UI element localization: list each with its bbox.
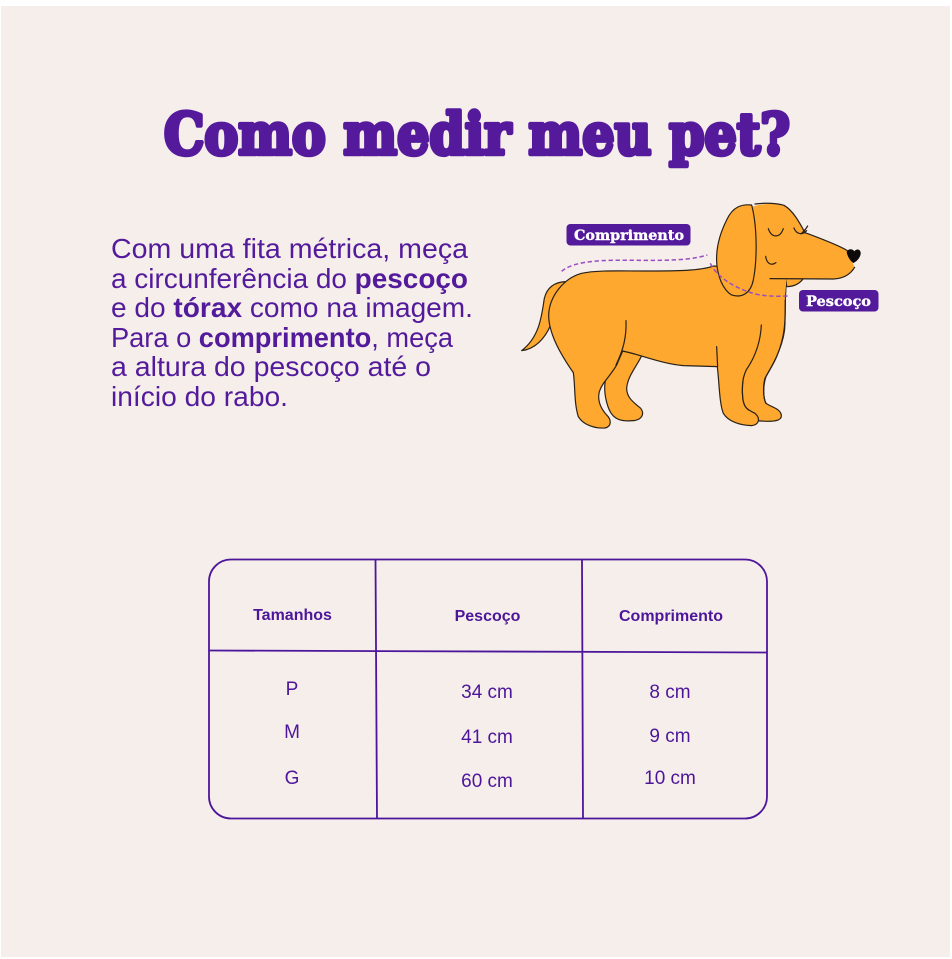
dog chin bbox=[786, 277, 803, 287]
instructions text block: a altura do pescoço até o bbox=[111, 351, 431, 382]
far rear leg bbox=[605, 351, 643, 421]
column: comprimento bbox=[619, 608, 723, 789]
dog illustration bbox=[522, 203, 861, 428]
size table bbox=[209, 560, 767, 818]
dog eyes bbox=[768, 226, 808, 236]
dog ear bbox=[717, 205, 756, 296]
column: tamanhos: Tamanhos bbox=[253, 607, 332, 624]
column: pescoço: 41 cm bbox=[461, 727, 513, 748]
column: tamanhos: M bbox=[284, 722, 300, 743]
title: Como medir meu pet? bbox=[164, 101, 790, 168]
head outline bbox=[755, 203, 855, 279]
instructions text block: e do tórax como na imagem. bbox=[111, 292, 473, 323]
dog body bbox=[549, 266, 787, 428]
length measuring line bbox=[562, 255, 707, 271]
instructions text block: Com uma fita métrica, meça bbox=[111, 233, 469, 264]
column: pescoço: 60 cm bbox=[461, 771, 513, 792]
instructions text block: a circunferência do pescoço bbox=[111, 263, 468, 294]
label: comprimento bbox=[566, 224, 690, 246]
leg and belly contour lines bbox=[616, 300, 785, 410]
instructions text block bbox=[111, 233, 473, 412]
instructions text block: início do rabo. bbox=[111, 381, 288, 412]
dog smile bbox=[766, 256, 776, 264]
instructions text block: Para o comprimento, meça bbox=[111, 322, 454, 353]
neck measuring line bbox=[710, 263, 789, 296]
table frame bbox=[209, 560, 767, 818]
dog tail bbox=[522, 282, 566, 351]
label: comprimento: Comprimento bbox=[574, 228, 684, 244]
column: tamanhos bbox=[253, 607, 332, 789]
column: comprimento: Comprimento bbox=[619, 608, 723, 625]
column: pescoço: 34 cm bbox=[461, 682, 513, 703]
column: comprimento: 10 cm bbox=[644, 768, 696, 789]
far front leg bbox=[737, 323, 785, 421]
column: comprimento: 8 cm bbox=[649, 682, 691, 703]
dog head bbox=[740, 204, 855, 300]
column: comprimento: 9 cm bbox=[649, 726, 691, 747]
chest fill between front legs bbox=[743, 298, 785, 403]
dog nose bbox=[847, 249, 861, 263]
label: pescoço bbox=[799, 290, 878, 312]
column: pescoço: Pescoço bbox=[455, 608, 521, 625]
label: pescoço: Pescoço bbox=[806, 294, 871, 310]
column: pescoço bbox=[455, 608, 521, 792]
column: tamanhos: P bbox=[286, 679, 298, 700]
column: tamanhos: G bbox=[285, 768, 299, 789]
